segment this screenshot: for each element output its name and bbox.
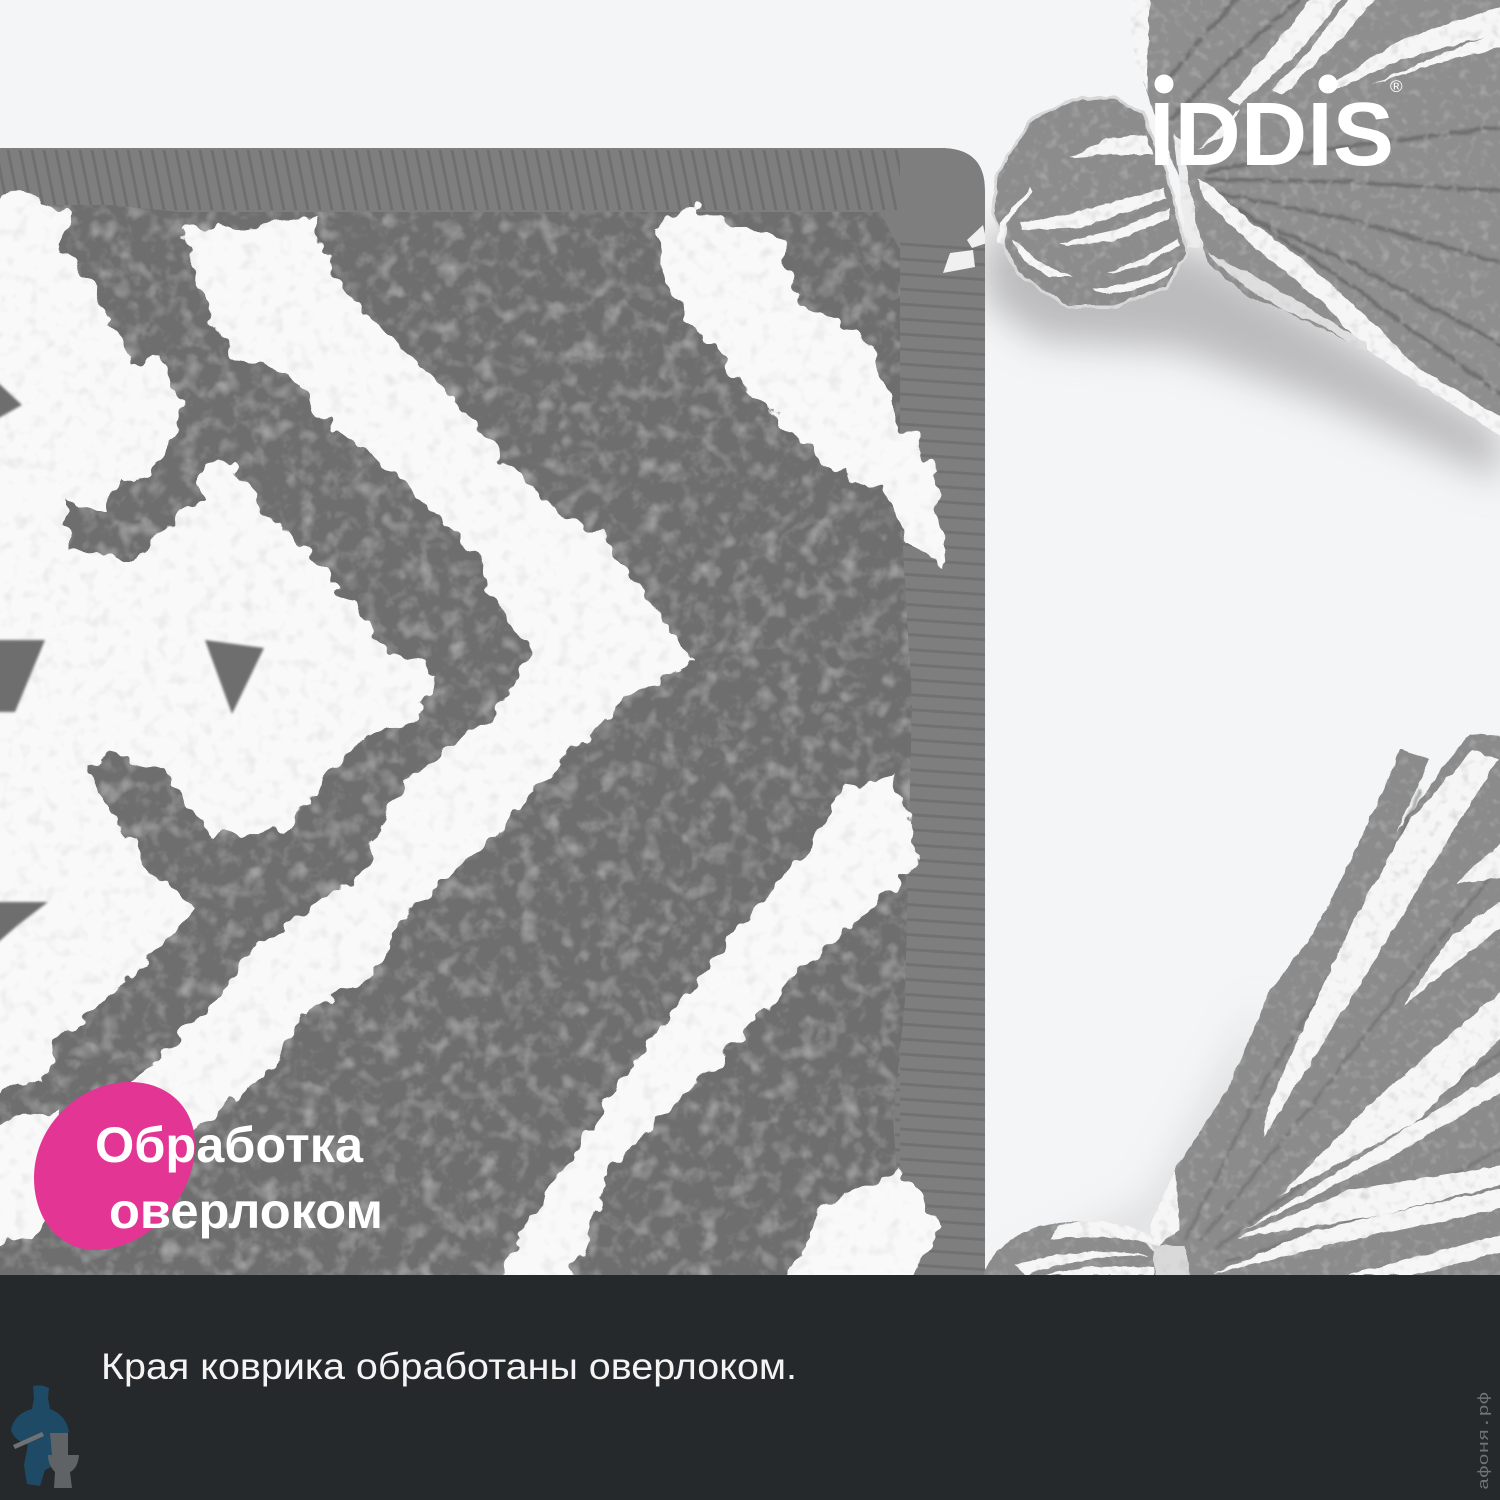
knot tie — [1173, 133, 1200, 248]
plumber figure — [11, 1385, 69, 1486]
heading line 2: оверлоком — [109, 1183, 383, 1239]
pattern: upper right lozenge — [655, 207, 945, 570]
pattern: lower left patch — [0, 1110, 70, 1248]
pile texture light — [0, 205, 912, 1275]
rug overlock border — [0, 148, 985, 1275]
plumber wrench — [13, 1432, 44, 1449]
knot white bands — [997, 135, 1180, 293]
toilet — [48, 1433, 79, 1488]
tassel knot ball — [993, 97, 1187, 307]
pattern: central diamond — [0, 193, 437, 1101]
heading line 1: Обработка — [95, 1117, 364, 1173]
tassel strand lines — [1160, 0, 1500, 408]
description text: Края коврика обработаны оверлоком. — [101, 1346, 797, 1387]
bottom tassel fan — [1150, 734, 1500, 1285]
bottom tassel white strands — [1150, 750, 1500, 1275]
registered mark: ® — [1390, 77, 1403, 96]
top border stitches — [0, 150, 900, 210]
tassel yarn — [993, 0, 1500, 447]
bottom knot white bands — [1015, 1222, 1155, 1275]
watermark: афоня.рф — [1476, 1392, 1493, 1490]
tassel white strands — [1125, 0, 1500, 447]
heading — [95, 1117, 383, 1239]
bottom tassel strand lines — [1185, 790, 1500, 1262]
white pattern on rug — [0, 193, 945, 1290]
icon: plumber with toilet — [11, 1385, 79, 1488]
pattern: chevron stripe — [131, 216, 695, 1130]
pile texture dark — [0, 205, 912, 1275]
logo wordmark: IDDIS — [1149, 85, 1394, 185]
bottom tassel — [983, 734, 1500, 1348]
pink blob — [34, 1082, 195, 1250]
dark holes in the pattern — [0, 380, 264, 945]
white yarn at rug corner — [943, 225, 987, 273]
tassel fan — [1125, 0, 1500, 445]
pattern: lower right stripe — [490, 775, 922, 1290]
logo dot 2 — [1318, 74, 1338, 94]
right border stitches — [895, 240, 985, 1275]
brand logo — [1149, 74, 1403, 185]
bottom knot tie — [1152, 1245, 1192, 1285]
tassel shadows on background — [985, 230, 1500, 1275]
logo dot 1 — [1154, 74, 1174, 94]
bottom knot ball — [983, 1222, 1167, 1348]
top tassel — [993, 0, 1500, 447]
pattern: bottom right patch — [787, 1167, 942, 1275]
bottom dark panel — [0, 1275, 1500, 1500]
rug pile field — [0, 205, 912, 1275]
rug corner — [0, 148, 987, 1290]
